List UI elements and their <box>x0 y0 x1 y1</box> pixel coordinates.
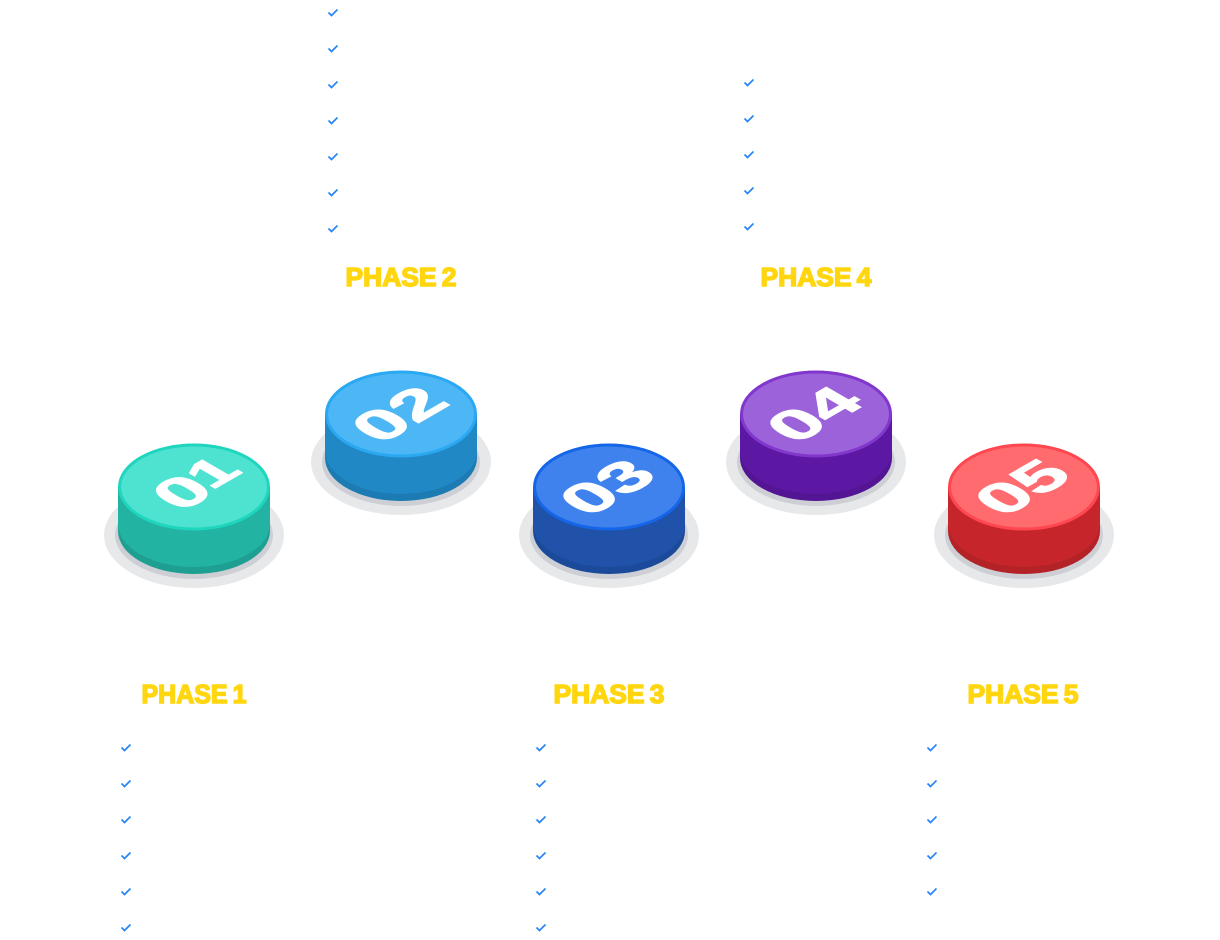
button: 05 <box>934 445 1114 588</box>
heading: phase 1: PHASE 1 <box>142 679 246 709</box>
number 03: 03 <box>544 451 671 524</box>
button: 03 <box>519 445 699 588</box>
checklist: phase 5 <box>928 744 936 894</box>
heading: phase 3: PHASE 3 <box>554 679 664 709</box>
button: 01 <box>104 445 284 588</box>
checklist: phase 4 <box>744 80 754 230</box>
checklist: phase 1 <box>122 744 130 930</box>
number 04: 04 <box>751 378 878 451</box>
button: 02 <box>311 372 491 515</box>
number 01: 0 <box>137 466 228 519</box>
number 02: 02 <box>336 378 463 451</box>
number 05: 05 <box>959 451 1086 524</box>
heading: phase 4: PHASE 4 <box>760 262 872 292</box>
checklist: phase 2 <box>328 10 338 232</box>
heading: phase 5: PHASE 5 <box>968 679 1078 709</box>
number 01 <box>137 448 259 519</box>
button: 04 <box>726 372 906 515</box>
checklist: phase 3 <box>536 744 546 930</box>
heading: phase 2: PHASE 2 <box>346 262 456 292</box>
number 01: 1 <box>171 448 254 496</box>
